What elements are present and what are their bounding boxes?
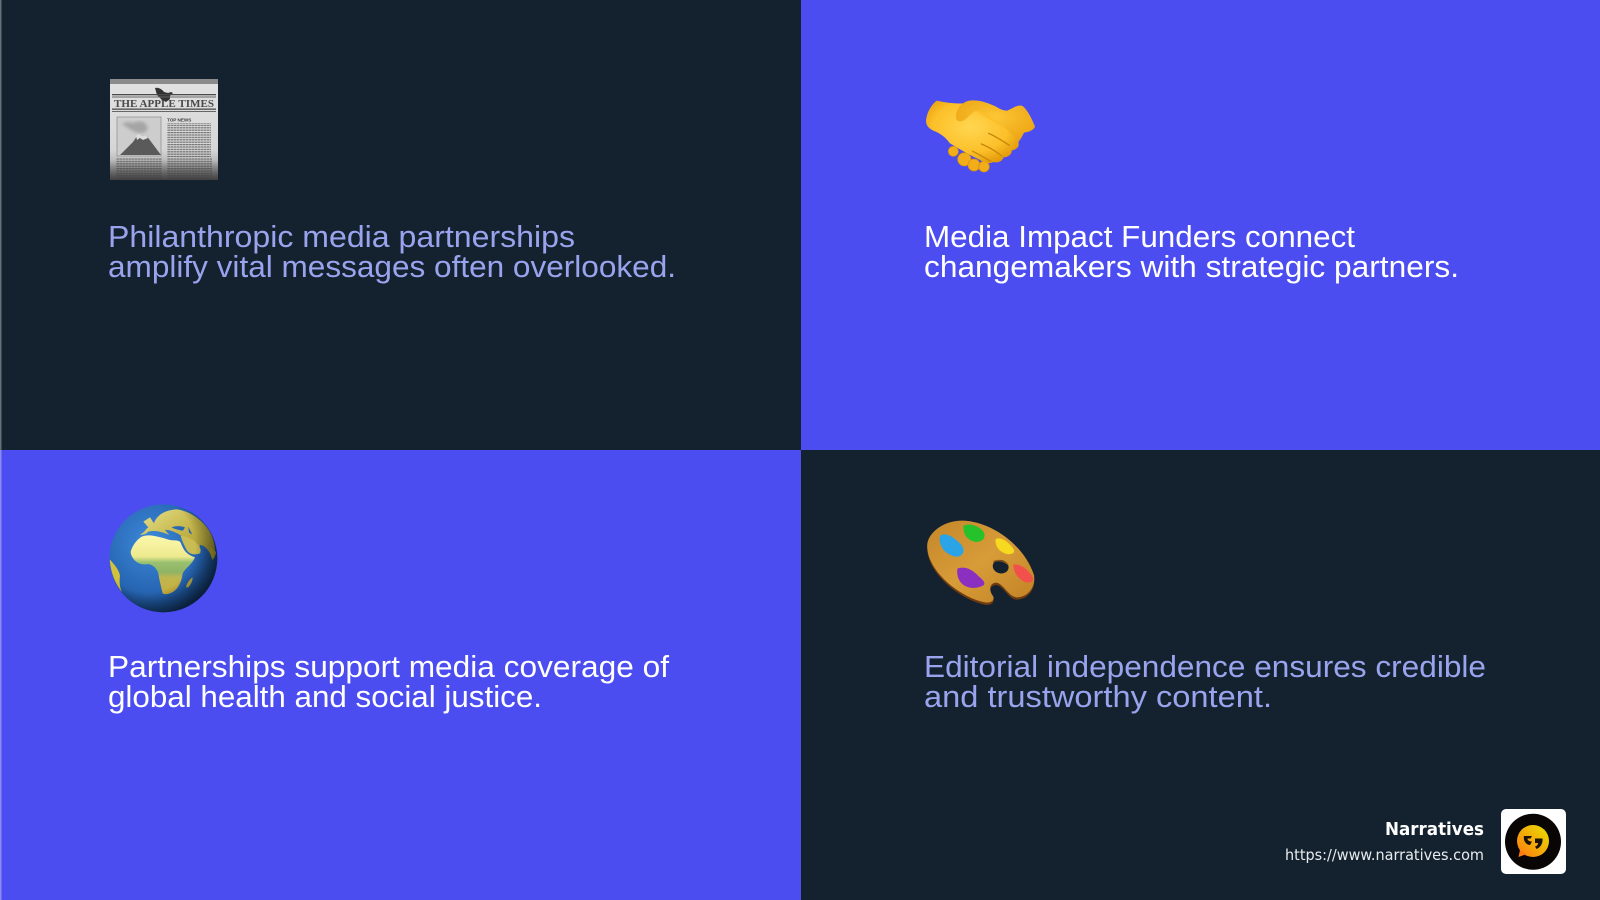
brand name: Narratives <box>1385 819 1484 840</box>
icon: globe <box>109 504 217 612</box>
icon: newspaper <box>110 79 218 180</box>
icon: newspaper: TOP NEWS <box>167 118 191 122</box>
madagascar <box>186 577 193 587</box>
paint: yellow <box>995 538 1014 554</box>
text: bottom left statement: Partnerships support media coverage of <box>108 649 669 684</box>
photo <box>117 117 161 156</box>
text: top left statement: amplify vital messages often overlooked. <box>108 249 676 284</box>
right hand and cuff <box>956 100 1035 142</box>
text: top left statement <box>108 219 676 284</box>
eagle <box>155 88 173 102</box>
icon: newspaper: THE APPLE TIMES <box>114 99 214 110</box>
text: bottom right statement <box>924 649 1486 714</box>
text: bottom left statement: global health and social justice. <box>108 679 542 714</box>
text: top right statement: changemakers with strategic partners. <box>924 249 1459 284</box>
text: top right statement <box>924 219 1459 284</box>
fingers <box>948 146 989 172</box>
eurasia <box>140 509 215 559</box>
icon: artist palette <box>927 521 1034 605</box>
panel: top right background <box>801 0 1600 450</box>
brand url: https://www.narratives.com <box>1285 846 1484 864</box>
left hand and cuff <box>926 101 1019 163</box>
paint: green <box>963 525 985 542</box>
paint: red <box>1013 564 1033 582</box>
paint: purple <box>957 568 984 588</box>
panel: bottom left background <box>0 450 801 900</box>
panel: bottom right background <box>801 450 1600 900</box>
text: bottom right statement: Editorial independence ensures credible <box>924 649 1486 684</box>
panel: top left background <box>0 0 801 450</box>
text: bottom right statement: and trustworthy content. <box>924 679 1272 714</box>
palm underlay <box>943 103 1018 153</box>
india <box>210 547 216 560</box>
text: top left statement: Philanthropic media partnerships <box>108 219 575 254</box>
icon: handshake <box>926 100 1035 172</box>
arabia <box>181 536 201 554</box>
paint: blue <box>940 534 964 557</box>
logo <box>1501 809 1566 874</box>
africa <box>131 535 195 594</box>
text: top right statement: Media Impact Funders connect <box>924 219 1355 254</box>
south america <box>110 559 122 592</box>
text: bottom left statement <box>108 649 669 714</box>
